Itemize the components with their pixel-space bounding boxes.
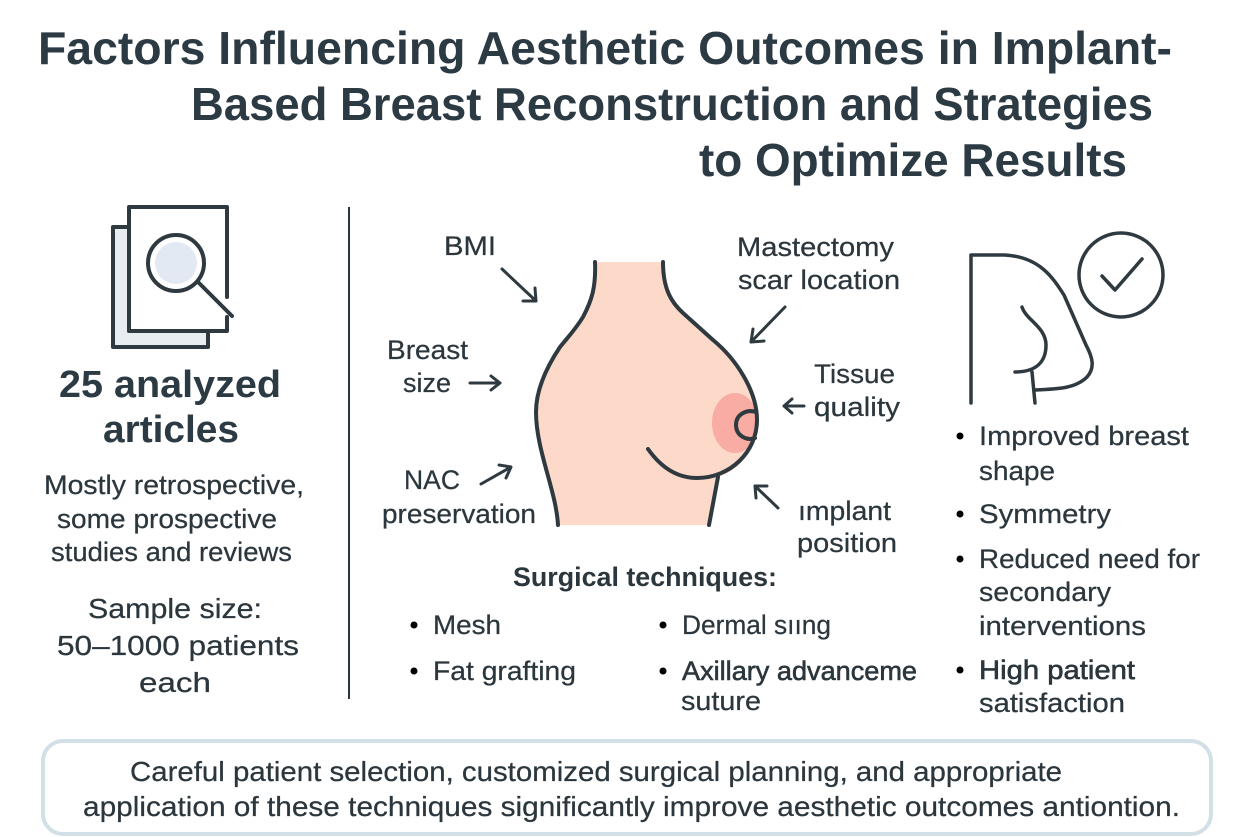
label: tissue quality	[814, 359, 901, 422]
list: surgical techniques, left	[410, 610, 576, 686]
list: surgical techniques, right: suture	[681, 686, 761, 716]
text: sample size: Sample size:	[88, 593, 262, 624]
label: breast size: size	[403, 368, 451, 398]
text: sample size: 50–1000 patients	[57, 630, 299, 661]
label: NAC preservation: preservation	[382, 499, 536, 529]
callout: conclusion: Careful patient selection, customized surgical planning, and appropriate	[130, 756, 1062, 787]
panel: factors diagram	[382, 231, 917, 716]
list: surgical techniques, right: Axillary advanceme	[682, 656, 917, 686]
label: mastectomy scar location: Mastectomy	[737, 232, 895, 262]
list: outcomes: High patient	[979, 655, 1136, 685]
text: study types	[44, 470, 304, 567]
heading: analyzed articles: articles	[103, 409, 239, 451]
list: surgical techniques, left: Fat grafting	[433, 656, 576, 686]
arrow: scar location	[751, 307, 785, 342]
heading: surgical techniques: Surgical techniques:	[513, 562, 777, 592]
label: tissue quality: Tissue	[814, 359, 895, 389]
arrow: BMI	[502, 269, 536, 301]
list: surgical techniques, right	[660, 610, 917, 716]
label: mastectomy scar location: scar location	[738, 265, 900, 295]
icon: documents with magnifying glass	[113, 207, 232, 347]
label: NAC preservation	[382, 465, 536, 529]
list: outcomes: interventions	[979, 611, 1146, 641]
list: outcomes: Symmetry	[979, 499, 1112, 529]
label: implant position: ımplant	[798, 496, 892, 526]
text: study types: Mostly retrospective,	[44, 470, 304, 500]
heading: analyzed articles: 25 analyzed	[59, 364, 281, 406]
label: mastectomy scar location	[737, 232, 900, 295]
title: Based Breast Reconstruction and Strategies	[191, 78, 1153, 130]
text: sample size: each	[139, 667, 211, 698]
label: breast size: Breast	[387, 335, 469, 365]
icon: breast profile outline	[971, 255, 1092, 403]
list: outcomes: secondary	[979, 577, 1112, 607]
title: to Optimize Results	[699, 134, 1127, 186]
label: implant position: position	[797, 528, 897, 558]
panel: study overview	[44, 207, 304, 698]
list: surgical techniques, left: Mesh	[433, 610, 501, 640]
label: tissue quality: quality	[814, 392, 901, 422]
title	[38, 22, 1172, 186]
label: implant position	[797, 496, 897, 558]
list: outcomes	[956, 421, 1200, 718]
heading: analyzed articles	[59, 364, 281, 451]
text: study types: some prospective	[57, 504, 277, 534]
title: Factors Influencing Aesthetic Outcomes in Implant-	[38, 22, 1172, 74]
label: breast size	[387, 335, 469, 398]
label: NAC preservation: NAC	[404, 465, 460, 495]
illustration: torso	[536, 262, 758, 525]
panel: outcomes	[956, 233, 1200, 718]
list: outcomes: satisfaction	[979, 688, 1125, 718]
text: study types: studies and reviews	[51, 537, 292, 567]
list: outcomes: Improved breast	[979, 421, 1190, 451]
arrow: breast size	[470, 376, 500, 390]
list: outcomes: shape	[979, 456, 1055, 486]
text: sample size	[57, 593, 299, 698]
arrow: implant position	[755, 486, 778, 508]
arrow: NAC preservation	[481, 465, 511, 484]
callout: conclusion: application of these techniques significantly improve aesthetic outcomes antiontion.	[83, 791, 1180, 822]
list: surgical techniques, right: Dermal sııng	[682, 610, 831, 640]
callout: conclusion	[43, 741, 1211, 834]
arrow: tissue quality	[784, 399, 804, 413]
label: BMI: BMI	[444, 231, 496, 261]
list: outcomes: Reduced need for	[979, 544, 1200, 574]
icon: check mark circle	[1079, 233, 1163, 317]
